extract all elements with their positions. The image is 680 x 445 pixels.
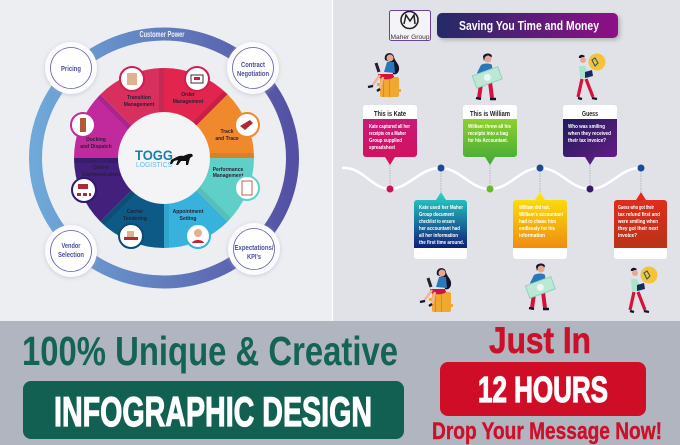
callout: This is Kate: spreadsheet bbox=[369, 145, 395, 151]
segment labels: Carrier bbox=[127, 209, 143, 215]
callout: Kate follow-up: the first time around. bbox=[419, 240, 464, 246]
segment labels: Transition bbox=[127, 95, 151, 101]
callout: Guess bbox=[563, 105, 617, 165]
callout: William follow-up: William did not. bbox=[519, 205, 550, 211]
callout: Guess: Who was smiling bbox=[568, 124, 605, 130]
badge: Expectations / KPIs bbox=[228, 223, 280, 276]
callout: This is William: William threw all his bbox=[468, 124, 511, 130]
segment labels: Management bbox=[173, 99, 204, 105]
banner: 12 Hours bbox=[440, 362, 646, 416]
callout: William follow-up bbox=[513, 192, 567, 259]
badge: Contract Negotiation bbox=[227, 42, 279, 95]
callout: William follow-up: endlessly for his bbox=[519, 226, 555, 232]
heading: 100% Unique & Creative: 100% Unique & Creative bbox=[22, 328, 398, 374]
title bar: Saving You Time and Money bbox=[459, 18, 600, 33]
illustration: Guess bottom bbox=[630, 266, 658, 312]
badge: Pricing: Pricing bbox=[61, 64, 81, 73]
logo: Maher Group: Maher Group bbox=[390, 34, 430, 41]
badge: Expectations / KPIs: Expectations/ bbox=[234, 243, 274, 252]
callout: Kate follow-up bbox=[414, 192, 467, 259]
banner: Infographic Design: INFOGRAPHIC DESIGN bbox=[54, 388, 372, 435]
center disc bbox=[118, 112, 210, 204]
logo: TOGG Logistics bbox=[135, 147, 193, 169]
callout: Guess follow-up: were smiling when bbox=[617, 219, 659, 225]
illustration: William top bbox=[472, 53, 502, 99]
timeline wave bbox=[342, 168, 640, 189]
segment labels: Docking bbox=[86, 137, 106, 143]
callout: William follow-up: William's accountant bbox=[519, 212, 563, 218]
callout: William follow-up: information bbox=[519, 233, 546, 239]
panel: bottom banner background bbox=[0, 321, 680, 445]
callout: Kate follow-up: Group document bbox=[419, 212, 454, 218]
logo: TOGG Logistics: LOGISTICS bbox=[136, 162, 172, 169]
circular diagram bbox=[36, 30, 292, 282]
segment labels: Track bbox=[220, 129, 234, 135]
illustration: Kate top bbox=[368, 53, 401, 97]
callout: This is Kate: Kate captured all her bbox=[369, 124, 411, 130]
panel: right background bbox=[333, 0, 680, 321]
badge: Pricing bbox=[45, 42, 97, 95]
badge: Vendor Selection: Vendor bbox=[62, 241, 81, 250]
logo: Maher Group bbox=[390, 10, 430, 41]
banner: Infographic Design bbox=[23, 381, 404, 439]
illustration: Kate bottom bbox=[420, 268, 453, 312]
outer ring bbox=[36, 34, 292, 282]
illustration: Guess top bbox=[578, 54, 606, 99]
icon badges on wheel bbox=[71, 67, 259, 248]
callout: Guess follow-up: they got their next bbox=[618, 226, 658, 232]
callout: Kate follow-up: checklist to ensure bbox=[419, 219, 455, 225]
callout: Guess: Guess bbox=[582, 111, 598, 118]
callout: Guess follow-up: Guess who got their bbox=[618, 205, 655, 211]
badge: Contract Negotiation: Negotiation bbox=[237, 69, 269, 78]
badge: Vendor Selection bbox=[45, 225, 97, 278]
segment labels: Communication bbox=[82, 172, 120, 178]
segment labels bbox=[80, 92, 244, 222]
callout: This is William: for his Accountant. bbox=[468, 138, 508, 144]
segment labels: and Dispatch bbox=[80, 144, 112, 150]
timeline nodes bbox=[386, 164, 644, 192]
callout: Guess follow-up: invoice? bbox=[618, 233, 638, 239]
segment labels: Order bbox=[181, 92, 195, 98]
callout: This is William bbox=[463, 105, 517, 165]
callout: Kate follow-up: Kate used her Maher bbox=[419, 205, 464, 211]
callout: Guess follow-up bbox=[614, 192, 667, 259]
title bar bbox=[437, 13, 620, 40]
callout: This is Kate: This is Kate bbox=[374, 111, 406, 118]
illustration: William bottom bbox=[525, 263, 555, 309]
connector lines bbox=[390, 165, 641, 192]
badge: Vendor Selection: Selection bbox=[58, 250, 84, 259]
segment labels: Performance bbox=[213, 167, 243, 173]
banner: 12 Hours: 12 HOURS bbox=[478, 369, 608, 410]
callout: William follow-up: had to chase him bbox=[519, 219, 556, 225]
callout: This is Kate: receipts on a Maher bbox=[369, 131, 407, 137]
badge: Contract Negotiation: Contract bbox=[241, 60, 265, 69]
ring label: Customer Power bbox=[140, 30, 184, 39]
callout: This is William: receipts into a bag bbox=[468, 131, 508, 137]
segment labels: and Trace bbox=[215, 136, 239, 142]
callout: Kate follow-up: all her information bbox=[419, 233, 459, 239]
callout: This is William: This is William bbox=[470, 111, 510, 118]
callout: Guess: their tax invoice? bbox=[568, 138, 607, 144]
badge: Expectations / KPIs: KPI's bbox=[247, 252, 261, 261]
callout: Kate follow-up: her accountant had bbox=[419, 226, 460, 232]
panel: left background bbox=[0, 0, 332, 321]
callout: Guess follow-up: tax refund first and bbox=[618, 212, 660, 218]
logo: TOGG Logistics: TOGG bbox=[135, 147, 173, 163]
segment labels: Setting bbox=[180, 216, 196, 222]
callout: This is Kate: Group supplied bbox=[369, 138, 402, 144]
segment labels: Online bbox=[93, 165, 109, 171]
callout: This is Kate bbox=[363, 105, 417, 165]
segment labels: Management bbox=[124, 102, 155, 108]
heading: Just In: Just In bbox=[489, 320, 591, 361]
segment labels: Appointment bbox=[173, 209, 204, 215]
wheel segments bbox=[74, 68, 254, 248]
callout: Guess: when they received bbox=[567, 131, 611, 137]
segment labels: Management bbox=[213, 173, 244, 179]
segment labels: Tendering bbox=[123, 216, 147, 222]
